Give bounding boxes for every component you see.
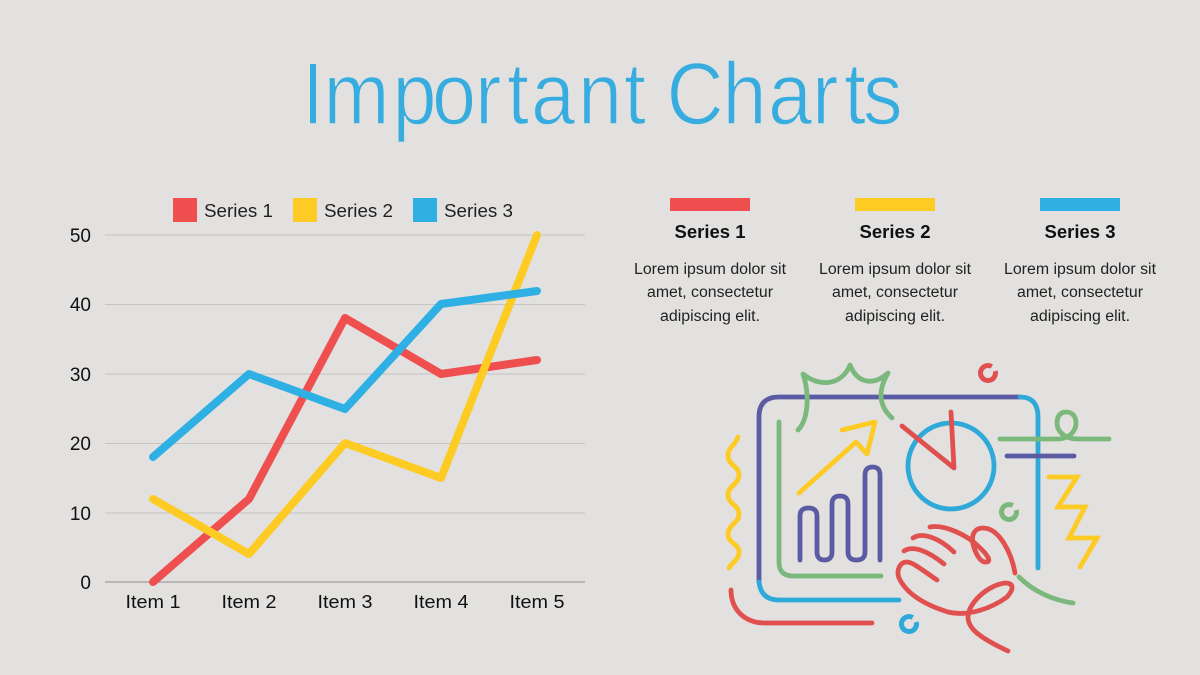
series 3 description <box>1004 198 1157 325</box>
icon: red hand <box>898 527 1015 651</box>
icon: screen frame <box>759 397 1038 600</box>
series 3 description: Lorem ipsum dolor sit <box>1004 261 1157 278</box>
chart legend: Series 3 <box>444 200 513 221</box>
icon: rising arrow <box>799 422 875 493</box>
x axis labels: Item 2 <box>222 591 276 612</box>
icon: pie clock <box>902 412 994 509</box>
series 2 description: adipiscing elit. <box>845 308 945 325</box>
chart legend: Series 1 <box>204 200 273 221</box>
y axis labels: 20 <box>70 434 91 455</box>
series 2 description <box>819 198 972 325</box>
line chart <box>70 198 585 612</box>
series 3 description: adipiscing elit. <box>1030 308 1130 325</box>
series 2 description: Series 2 <box>860 221 930 242</box>
y axis labels: 0 <box>80 573 91 594</box>
series 1 description: adipiscing elit. <box>660 308 760 325</box>
x axis labels: Item 1 <box>126 591 180 612</box>
y axis labels: 30 <box>70 365 91 386</box>
icon: green loop line <box>1000 412 1109 439</box>
y axis labels: 50 <box>70 226 91 247</box>
series 1 description <box>634 198 787 325</box>
x axis labels: Item 3 <box>318 591 372 612</box>
series 3 line <box>153 291 537 457</box>
chart legend <box>173 198 513 222</box>
icon: bar outline <box>800 467 880 560</box>
icon: purple line <box>1007 454 1074 458</box>
icon: red corner line <box>731 590 872 623</box>
title: Important Charts <box>302 44 903 143</box>
series 3 description: amet, consectetur <box>1017 284 1143 301</box>
icon: yellow zigzag <box>1049 477 1097 567</box>
series 2 description: amet, consectetur <box>832 284 958 301</box>
series 1 description: Lorem ipsum dolor sit <box>634 261 787 278</box>
illustration: hand pointing at data screen <box>728 364 1109 651</box>
chart legend: Series 2 <box>324 200 393 221</box>
series 3 description: Series 3 <box>1044 221 1116 242</box>
x axis labels <box>126 591 564 612</box>
x axis labels: Item 4 <box>414 591 468 612</box>
series 1 line <box>153 318 537 582</box>
y axis labels: 10 <box>70 504 91 525</box>
x axis labels: Item 5 <box>510 591 564 612</box>
icon: green curve <box>1019 577 1073 603</box>
series 2 line <box>153 235 537 554</box>
series 2 description: Lorem ipsum dolor sit <box>819 261 972 278</box>
icon: red ring <box>979 364 997 382</box>
icon: green ring <box>1000 503 1018 521</box>
icon: blue ring <box>900 615 918 633</box>
y axis labels <box>70 226 91 594</box>
icon: green axis <box>779 422 881 576</box>
series 1 description: amet, consectetur <box>647 284 773 301</box>
series 1 description: Series 1 <box>674 221 746 242</box>
icon: yellow squiggle <box>728 437 739 568</box>
y axis labels: 40 <box>70 295 91 316</box>
icon: green crown burst <box>798 365 892 430</box>
